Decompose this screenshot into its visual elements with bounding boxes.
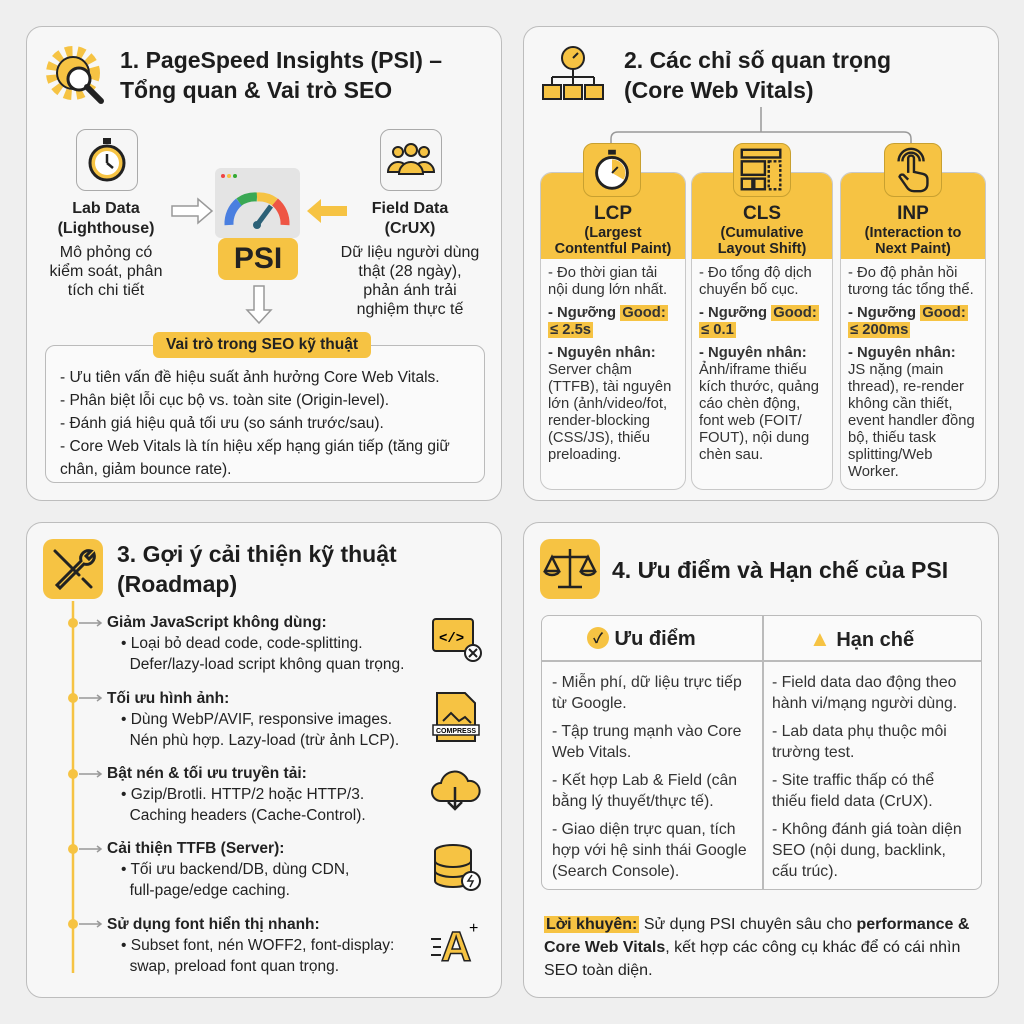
cons list: - Site traffic thấp có thể thiếu field data (CrUX).: [772, 772, 934, 810]
card: CLS: CLS: [743, 203, 781, 224]
item: fonts: [107, 916, 394, 975]
icon: users: [380, 129, 442, 191]
item: images: • Dùng WebP/AVIF, responsive images.: [121, 711, 392, 728]
item: compression: • Gzip/Brotli. HTTP/2 hoặc HTTP/3.: [121, 786, 364, 803]
SEO role box: - Phân biệt lỗi cục bộ vs. toàn site (Origin-level).: [60, 392, 389, 409]
item: fonts: • Subset font, nén WOFF2, font-display:: [121, 937, 394, 954]
SEO role box: - Core Web Vitals là tín hiệu xếp hạng gián tiếp (tăng giữ chân, giảm bounce rate).: [60, 438, 450, 478]
card: LCP: LCP: [594, 203, 632, 224]
SEO role box: - Đánh giá hiệu quả tối ưu (so sánh trước/sau).: [60, 415, 384, 432]
timeline: [68, 601, 102, 973]
card: INP: - Đo độ phản hồi tương tác tổng thể. - Ngưỡng Good:: [848, 265, 974, 321]
card: LCP: (Largest: [584, 225, 642, 241]
heading: SEO role: Vai trò trong SEO kỹ thuật: [166, 336, 358, 353]
SEO role box: [45, 345, 485, 483]
icon: hierarchy: [542, 46, 604, 100]
card: LCP: [540, 172, 686, 490]
cons list: - Field data dao động theo hành vi/mạng người dùng.: [772, 674, 957, 712]
title: 1. PageSpeed Insights (PSI) –: [120, 47, 442, 73]
card: INP: (Interaction to: [865, 225, 961, 241]
panel 1: PSI overview: nghiệm thực tế: [357, 301, 463, 318]
card: INP: ≤ 200ms - Nguyên nhân:: [848, 322, 956, 361]
card: LCP: Server chậm (TTFB), tài nguyên lớn (ảnh/video/fot, render-blocking (CSS/JS), thiếu preloading.: [548, 362, 671, 463]
card: INP: [840, 172, 986, 490]
pros list: - Kết hợp Lab & Field (cân bằng lý thuyết/thực tế).: [552, 772, 737, 810]
icon: font A: [431, 920, 478, 969]
panel 1: PSI overview: tích chi tiết: [68, 282, 144, 299]
icon: font A: +: [469, 920, 478, 937]
panel 2: Core Web Vitals: [523, 26, 999, 501]
card: CLS: Ảnh/iframe thiếu kích thước, quảng cáo chèn động, font web (FOIT/ FOUT), nội dung chèn sau.: [699, 362, 819, 463]
panel 1: PSI overview: [26, 26, 502, 501]
icon: stopwatch: [76, 129, 138, 191]
arrow: field to PSI: [307, 199, 347, 223]
item: fonts: swap, preload font quan trọng.: [130, 958, 339, 975]
item: fonts: Sử dụng font hiển thị nhanh:: [107, 916, 320, 933]
lab data block: [50, 129, 162, 299]
panel 1: PSI overview: (CrUX): [385, 220, 435, 237]
title: 2. Các chỉ số quan trọng: [624, 47, 891, 73]
item: images: [107, 690, 399, 749]
item: images: Tối ưu hình ảnh:: [107, 690, 229, 707]
card: INP: INP: [897, 203, 929, 224]
item: TTFB: [107, 840, 349, 899]
icon: LCP stopwatch: [583, 143, 641, 197]
heading: SEO role: [153, 332, 371, 358]
card: LCP: ≤ 2.5s - Nguyên nhân:: [548, 322, 656, 361]
PSI gauge and label: [215, 168, 300, 280]
icon: scales: [540, 539, 600, 599]
pros list: - Miễn phí, dữ liệu trực tiếp từ Google.: [552, 674, 742, 712]
header: pros: ✓: [593, 630, 603, 646]
icon: code: </>: [439, 631, 464, 647]
header: cons: [809, 626, 914, 651]
cons list: [772, 674, 962, 880]
panel 1: PSI overview: kiểm soát, phân: [50, 263, 162, 280]
item: compression: Caching headers (Cache-Control).: [130, 807, 366, 824]
item: compression: Bật nén & tối ưu truyền tải:: [107, 765, 307, 782]
advice text: Lời khuyên: Sử dụng PSI chuyên sâu cho performance & Core Web Vitals, kết hợp các công cụ khác để có cái nhìn SEO toàn diện.: [544, 916, 969, 979]
header: cons: Hạn chế: [836, 629, 914, 651]
panel 1: PSI overview: thật (28 ngày),: [358, 263, 462, 280]
title: Tổng quan & Vai trò SEO: [120, 77, 392, 103]
PSI gauge and label: PSI: [234, 242, 282, 275]
item: JS: • Loại bỏ dead code, code-splitting.: [121, 635, 363, 652]
card: LCP: Contentful Paint): [555, 241, 671, 257]
card: INP: JS nặng (main thread), re-render không cần thiết, event handler đồng bộ, thiếu task splitting/Web Worker.: [848, 362, 975, 480]
pros list: [552, 673, 747, 880]
panel 1: PSI overview: Lab Data: [72, 200, 140, 217]
panel 1: PSI overview: Mô phỏng có: [60, 244, 152, 261]
item: TTFB: full-page/edge caching.: [130, 882, 290, 899]
icon: database: [434, 844, 481, 891]
panel 1: PSI overview: phản ánh trải: [363, 282, 457, 299]
card: INP: Next Paint): [875, 241, 951, 257]
card: CLS: Layout Shift): [718, 241, 806, 257]
arrow: lab to PSI: [171, 198, 213, 224]
panel 1: PSI overview: Dữ liệu người dùng: [341, 244, 479, 261]
icon: gear magnifier: [46, 46, 104, 104]
cons list: - Lab data phụ thuộc môi trường test.: [772, 723, 947, 761]
icon: code: [432, 618, 482, 662]
card: CLS: (Cumulative: [720, 225, 804, 241]
title: (Core Web Vitals): [624, 77, 814, 103]
title: (Roadmap): [117, 571, 237, 597]
item: images: Nén phù hợp. Lazy-load (trừ ảnh LCP).: [130, 732, 399, 749]
panel 4: pros and cons: [523, 522, 999, 998]
item: JS: Defer/lazy-load script không quan trọng.: [130, 656, 404, 673]
comparison table: [541, 615, 982, 890]
icon: font A: A: [441, 923, 471, 969]
header: pros: Ưu điểm: [615, 628, 696, 650]
title: 4. Ưu điểm và Hạn chế của PSI: [612, 557, 948, 583]
card: CLS: ≤ 0.1 - Nguyên nhân:: [699, 322, 807, 361]
title: [117, 541, 397, 597]
cons list: - Không đánh giá toàn diện SEO (nội dung, backlink, cấu trúc).: [772, 821, 962, 880]
item: TTFB: Cải thiện TTFB (Server):: [107, 840, 284, 857]
arrow: down: [245, 285, 273, 324]
title: 3. Gợi ý cải thiện kỹ thuật: [117, 541, 397, 567]
item: compression: [107, 765, 366, 824]
panel 3: roadmap: [26, 522, 502, 998]
card: CLS: [691, 172, 833, 490]
item: JS: [107, 614, 404, 673]
pros list: - Giao diện trực quan, tích hợp với hệ sinh thái Google (Search Console).: [552, 821, 747, 880]
SEO role box: - Ưu tiên vấn đề hiệu suất ảnh hưởng Core Web Vitals.: [60, 369, 440, 386]
icon: compress image: COMPRESS: [436, 728, 476, 735]
icon: INP touch: [884, 143, 942, 197]
field data block: [341, 129, 479, 318]
icon: tools: [43, 539, 103, 599]
item: TTFB: • Tối ưu backend/DB, dùng CDN,: [121, 861, 349, 878]
card: LCP: - Đo thời gian tải nội dung lớn nhất. - Ngưỡng Good:: [548, 265, 667, 321]
pros list: - Tập trung mạnh vào Core Web Vitals.: [552, 723, 741, 761]
card: CLS: - Đo tổng độ dịch chuyển bố cục. - Ngưỡng Good:: [699, 265, 817, 321]
item: JS: Giảm JavaScript không dùng:: [107, 614, 327, 631]
icon: compress image: [432, 692, 480, 742]
icon: cloud download: [431, 770, 481, 811]
panel 1: PSI overview: Field Data: [372, 200, 448, 217]
title: [624, 47, 891, 103]
header: cons: ▲: [809, 626, 831, 651]
panel 1: PSI overview: (Lighthouse): [58, 220, 154, 237]
connector lines: [610, 107, 912, 143]
icon: CLS layout: [733, 143, 791, 197]
title: [120, 47, 442, 103]
